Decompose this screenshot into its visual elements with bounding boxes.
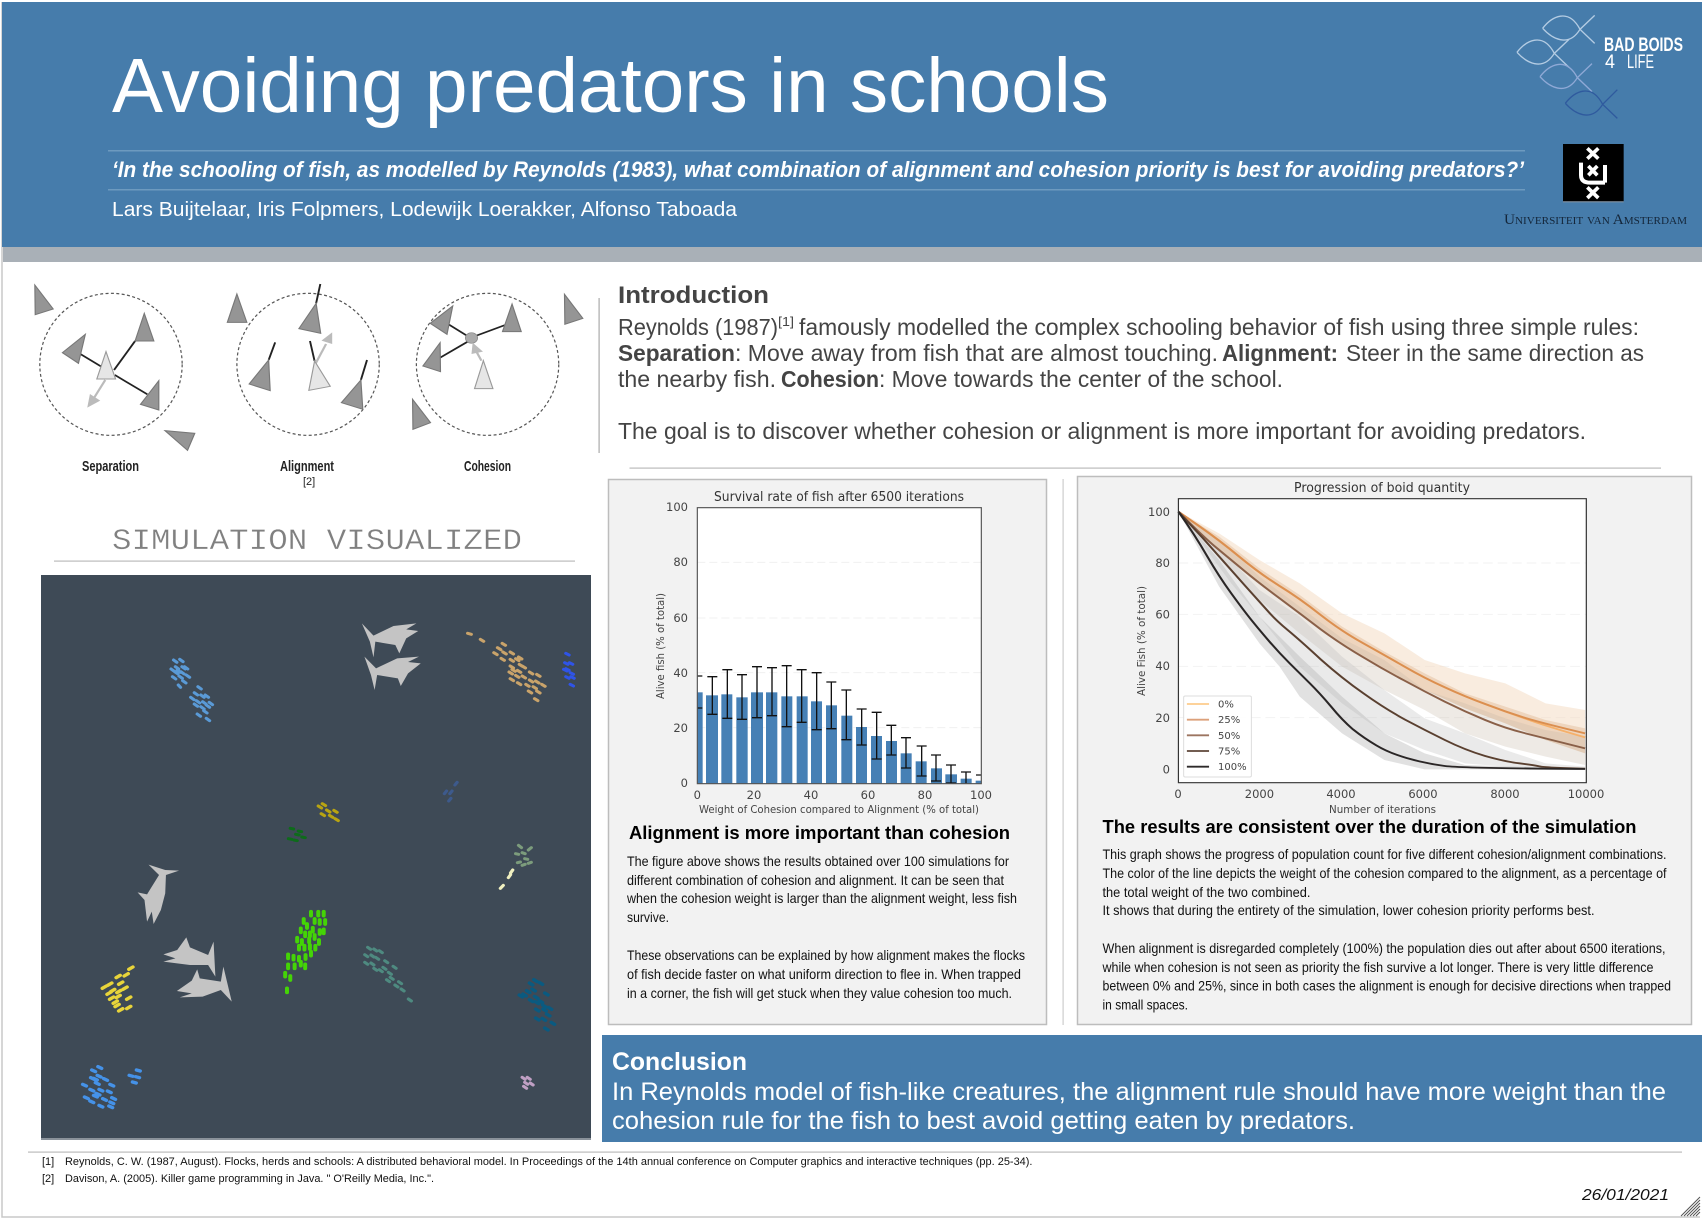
bar chart: survival rate: 60	[673, 611, 688, 625]
resize grip	[1681, 1197, 1700, 1216]
line chart: boid quantity: 25%	[1218, 715, 1240, 726]
line chart: boid quantity: 100%	[1218, 762, 1247, 773]
introduction text: Reynolds (1987)	[618, 314, 778, 340]
bar chart: survival rate: 40	[804, 788, 818, 802]
references: [2]	[42, 1173, 54, 1185]
finding text: The figure above shows the results obtained over 100 simulations for	[627, 853, 1009, 869]
bar chart: survival rate: 100	[666, 500, 688, 514]
authors: Lars Buijtelaar, Iris Folpmers, Lodewijk Loerakker, Alfonso Taboada	[112, 198, 738, 221]
cohesion rule	[413, 293, 583, 435]
title: Avoiding predators in schools	[112, 43, 1109, 129]
logo text: LIFE	[1627, 52, 1654, 73]
introduction text: Cohesion	[781, 366, 879, 392]
references: [1]	[42, 1156, 54, 1168]
introduction text: [1]	[778, 314, 794, 329]
heading: simulation visualized: SIMULATION VISUALIZED	[112, 525, 522, 559]
line chart: boid quantity: 40	[1155, 659, 1170, 673]
introduction text: The goal is to discover whether cohesion or alignment is more important for avoiding predators.	[618, 418, 1586, 444]
separation rule	[35, 285, 195, 450]
introduction text: : Move away from fish that are almost touching.	[735, 340, 1218, 366]
finding text	[626, 853, 1025, 1001]
panel: survival rate	[608, 480, 1046, 1024]
conclusion heading: Conclusion	[612, 1048, 747, 1076]
introduction text: the nearby fish.	[618, 366, 776, 392]
header banner	[2, 2, 1702, 262]
logo text	[1604, 35, 1683, 73]
introduction text	[618, 314, 1644, 444]
consistency text	[1102, 846, 1671, 1012]
finding heading: Alignment is more important than cohesion	[629, 822, 1010, 843]
introduction text: Separation	[618, 340, 735, 366]
finding text: different combination of cohesion and alignment. It can be seen that	[627, 872, 1004, 888]
line chart: boid quantity: 80	[1155, 556, 1170, 570]
line chart: boid quantity: 50%	[1218, 731, 1240, 742]
date: 26/01/2021	[1581, 1187, 1669, 1204]
consistency text: in small spaces.	[1102, 996, 1188, 1012]
conclusion text: In Reynolds model of fish-like creatures, the alignment rule should have more weight than the	[612, 1078, 1666, 1106]
conclusion text	[612, 1078, 1666, 1135]
panel: conclusion	[602, 1035, 1702, 1142]
bar chart: survival rate: Weight of Cohesion compared to Alignment (% of total)	[699, 803, 979, 816]
research question: ‘In the schooling of fish, as modelled by Reynolds (1983), what combination of alignment and cohesion priority is best for avoiding predators?’	[112, 157, 1525, 182]
introduction text: Alignment:	[1222, 340, 1338, 366]
references: Davison, A. (2005). Killer game programming in Java. " O'Reilly Media, Inc.".	[65, 1173, 434, 1185]
line chart: boid quantity: 20	[1155, 711, 1170, 725]
logo: bad boids fish	[1517, 15, 1617, 118]
introduction heading: Introduction	[618, 282, 769, 309]
bar chart: survival rate: Survival rate of fish after 6500 iterations	[714, 490, 964, 505]
consistency text: It shows that during the entirety of the simulation, lower cohesion priority performs best.	[1102, 902, 1594, 918]
predators and fish upper	[171, 623, 574, 865]
legend	[1184, 696, 1251, 777]
bar chart: survival rate	[654, 490, 992, 816]
consistency heading: The results are consistent over the duration of the simulation	[1102, 816, 1636, 837]
bar chart: survival rate: 100	[970, 788, 992, 802]
logo text: 4	[1605, 52, 1615, 73]
line chart: boid quantity: 8000	[1490, 787, 1520, 801]
finding text: These observations can be explained by how alignment makes the flocks	[627, 947, 1025, 963]
conclusion text: cohesion rule for the fish to best avoid getting eaten by predators.	[612, 1107, 1355, 1135]
predators and fish lower	[83, 865, 555, 1108]
bar chart: survival rate: 20	[673, 721, 688, 735]
line chart: boid quantity: 0	[1163, 762, 1170, 776]
line chart: boid quantity	[1135, 481, 1604, 816]
finding text: of fish decide faster on what uniform direction to flee in. When trapped	[627, 966, 1021, 982]
line chart: boid quantity: 0	[1174, 787, 1182, 801]
introduction text: : Move towards the center of the school.	[879, 366, 1283, 392]
university name: Universiteit van Amsterdam	[1504, 212, 1687, 228]
finding text: survive.	[627, 909, 669, 925]
line chart: boid quantity: 0%	[1218, 700, 1234, 710]
bar chart: survival rate: 0	[694, 788, 701, 802]
bar chart: survival rate: 0	[681, 776, 688, 790]
references	[42, 1156, 1032, 1185]
line chart: boid quantity: 4000	[1326, 787, 1356, 801]
diagram labels: Separation	[82, 458, 139, 475]
finding text: in a corner, the fish will get stuck when they value cohesion too much.	[627, 985, 1012, 1001]
diagram labels: Alignment	[280, 458, 334, 475]
line chart: boid quantity: 10000	[1568, 787, 1604, 801]
consistency text: while when cohesion is not seen as priority the fish survive a lot longer. There is very little difference	[1102, 959, 1654, 975]
line chart: boid quantity: 100	[1148, 505, 1170, 519]
line chart: boid quantity: 6000	[1408, 787, 1438, 801]
diagram labels	[82, 458, 511, 488]
alignment rule	[227, 284, 379, 435]
bar chart: survival rate: 40	[673, 666, 688, 680]
line chart: boid quantity: 75%	[1218, 746, 1240, 758]
line chart: boid quantity: Progression of boid quantity	[1294, 481, 1470, 496]
panel: boid progression	[1078, 476, 1692, 1024]
panel: introduction	[618, 282, 1644, 444]
references: Reynolds, C. W. (1987, August). Flocks, herds and schools: A distributed behavioral model. In Proceedings of the 14th annual conference on Computer graphics and interactive techniques (pp. 25-34).	[65, 1156, 1032, 1168]
consistency text: the total weight of the two combined.	[1102, 884, 1310, 900]
introduction text: famously modelled the complex schooling behavior of fish using three simple rules:	[799, 314, 1639, 340]
diagram: boids rules	[35, 284, 583, 488]
line chart: boid quantity: 2000	[1245, 787, 1274, 801]
diagram labels: [2]	[303, 476, 315, 488]
panel: simulation screenshot	[41, 575, 591, 1140]
bar chart: survival rate: 20	[747, 788, 761, 802]
line chart: boid quantity: Alive Fish (% of total)	[1135, 586, 1148, 696]
line chart: boid quantity: 60	[1155, 608, 1170, 622]
line chart: boid quantity: Number of iterations	[1329, 803, 1436, 816]
finding text: when the cohesion weight is larger than the alignment weight, less fish	[626, 890, 1017, 906]
diagram labels: Cohesion	[464, 458, 511, 475]
bar chart: survival rate: 80	[673, 555, 688, 569]
logo: university of amsterdam crest	[1563, 144, 1624, 202]
bar chart: survival rate: Alive fish (% of total)	[654, 593, 667, 699]
bar chart: survival rate: 60	[861, 788, 875, 802]
bar chart: survival rate: 80	[918, 788, 932, 802]
introduction text: Steer in the same direction as	[1346, 340, 1644, 366]
